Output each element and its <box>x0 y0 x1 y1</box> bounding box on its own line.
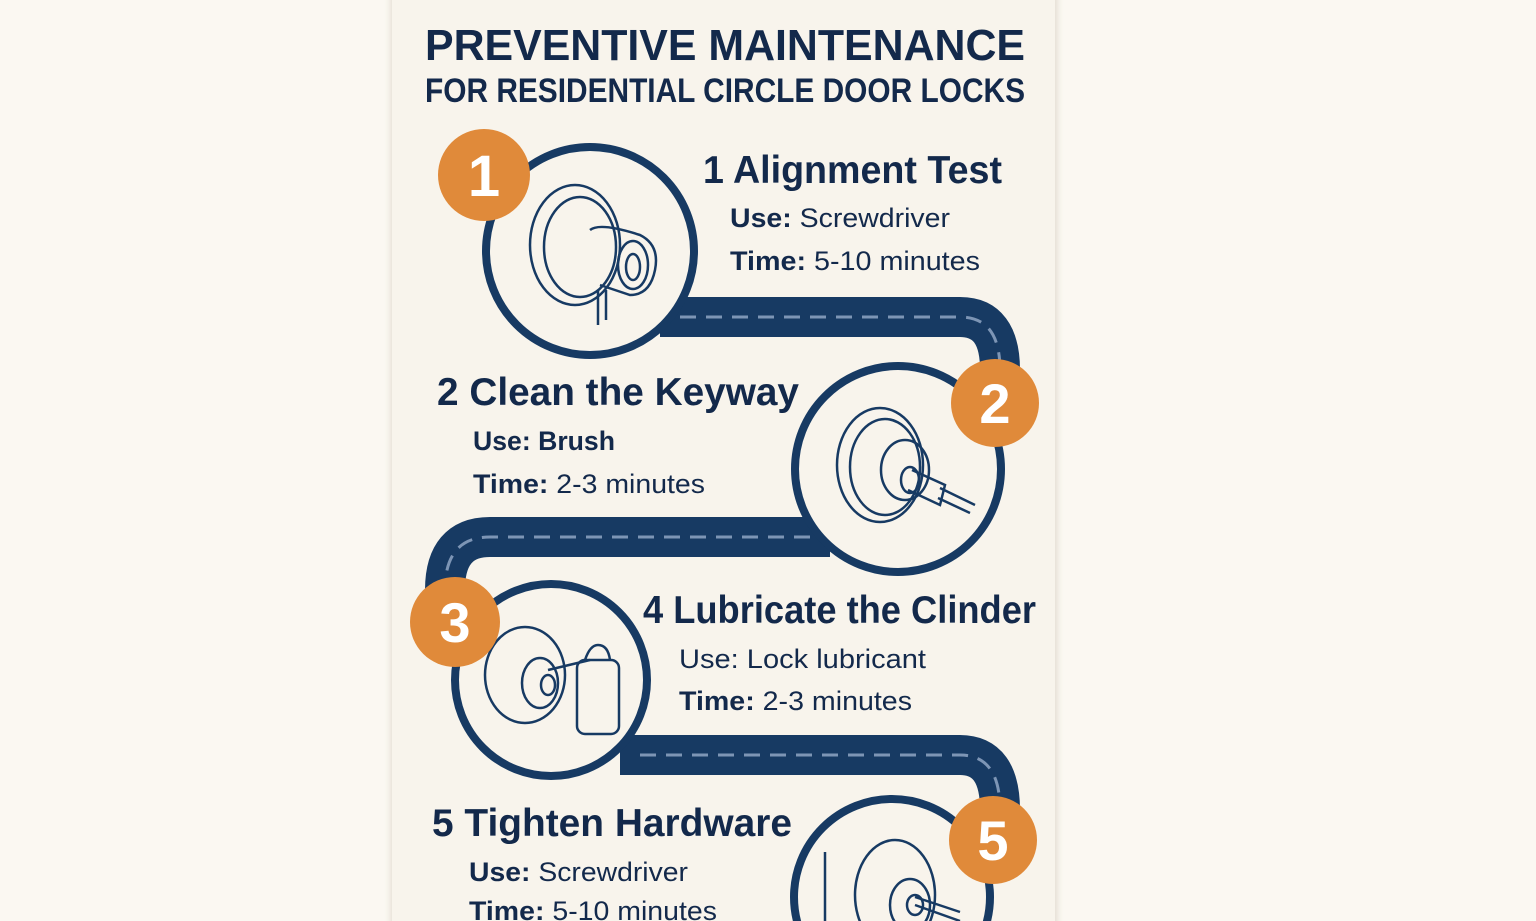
step 5: circle icon screwdriver <box>794 799 990 921</box>
step 5 text: 5 Tighten Hardware <box>432 802 792 845</box>
badge 5 <box>949 796 1037 884</box>
road path <box>445 317 1000 810</box>
step 1: circle icon knob <box>486 147 694 355</box>
step 2: circle icon brush <box>795 366 1001 572</box>
step 2 text <box>437 371 799 499</box>
step 2 text: Use: Brush <box>473 426 615 456</box>
badge 1: 1 <box>468 144 500 209</box>
step 1 text: Time: 5-10 minutes <box>730 246 980 276</box>
step 4 text <box>643 589 1036 716</box>
badge 2 <box>951 359 1039 447</box>
badge 3: 3 <box>439 591 471 654</box>
step 2 text: 2 Clean the Keyway <box>437 371 799 414</box>
step 5 text: Use: Screwdriver <box>469 857 688 887</box>
step 3: circle icon lubricant <box>455 584 647 776</box>
step 4 text: Time: 2-3 minutes <box>679 686 912 716</box>
step 4 text: 4 Lubricate the Clinder <box>643 589 1036 632</box>
step 5 text <box>432 802 792 921</box>
subtitle: FOR RESIDENTIAL CIRCLE DOOR LOCKS <box>425 72 1025 110</box>
step 1 text: Use: Screwdriver <box>730 203 950 233</box>
badge 1 <box>438 129 530 221</box>
badge 5: 5 <box>977 809 1009 872</box>
panel: infographic card <box>392 0 1055 921</box>
step 2 text: Time: 2-3 minutes <box>473 469 705 499</box>
badge 3 <box>410 577 500 667</box>
step 1 text: 1 Alignment Test <box>703 149 1002 192</box>
badge 2: 2 <box>979 372 1011 435</box>
step 1 text <box>703 149 1002 276</box>
step 4 text: Use: Lock lubricant <box>679 644 927 674</box>
title: PREVENTIVE MAINTENANCE <box>425 21 1025 70</box>
